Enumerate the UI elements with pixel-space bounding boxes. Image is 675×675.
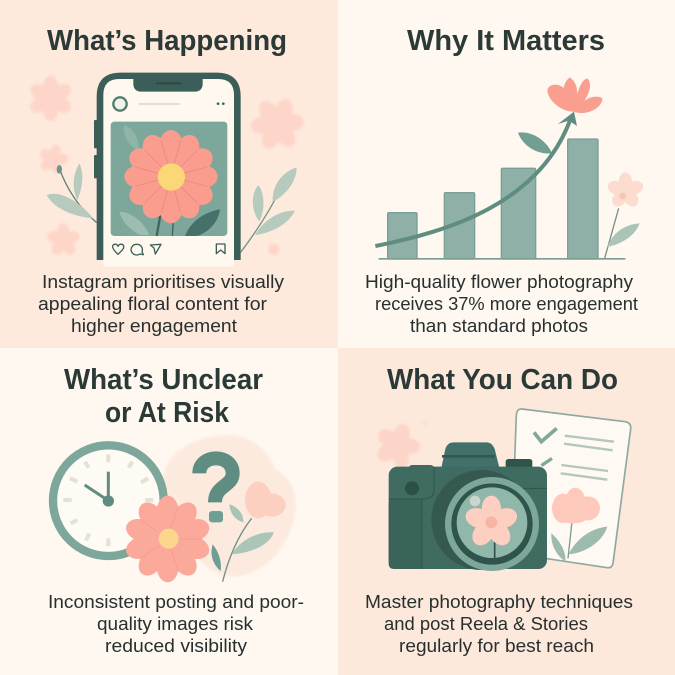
illustration: camera and checklist bbox=[367, 409, 631, 571]
flower on arrow bbox=[547, 77, 602, 113]
leaf on arrow bbox=[518, 132, 552, 154]
body text: what's unclear: quality images risk bbox=[97, 614, 254, 634]
heading: what you can do: What You Can Do bbox=[387, 364, 618, 396]
heading: what's unclear or at risk: or At Risk bbox=[105, 397, 230, 429]
heading: what's happening: What’s Happening bbox=[47, 25, 287, 57]
panel background: what's unclear bbox=[0, 348, 338, 675]
illustration: clock, question mark and flowers bbox=[53, 435, 296, 582]
small pale flower bbox=[605, 172, 645, 258]
sprig bbox=[211, 504, 274, 582]
body text: what's unclear bbox=[48, 592, 304, 656]
panel: what's happening bbox=[0, 0, 338, 348]
body text: why it matters: than standard photos bbox=[410, 316, 588, 336]
illustration: rising bar chart bbox=[375, 77, 645, 260]
body text: what you can do: Master photography techniques bbox=[365, 592, 633, 612]
body text: why it matters bbox=[365, 272, 638, 336]
left branch bbox=[47, 163, 97, 223]
checklist paper bbox=[511, 409, 631, 568]
pale tulip bbox=[245, 482, 286, 518]
body text: what's unclear: reduced visibility bbox=[105, 636, 247, 656]
body text: what's happening: appealing floral content for bbox=[38, 294, 267, 314]
panel background: what's happening bbox=[0, 0, 338, 348]
decorative pale flowers bbox=[27, 76, 314, 257]
body text: what you can do bbox=[365, 592, 633, 656]
action icons bbox=[113, 244, 225, 255]
bars bbox=[388, 139, 598, 259]
body text: why it matters: High-quality flower photography bbox=[365, 272, 633, 292]
panel: why it matters bbox=[338, 0, 675, 348]
body text: what you can do: regularly for best reach bbox=[399, 636, 594, 656]
panel: what you can do bbox=[338, 348, 675, 675]
body text: what's unclear: Inconsistent posting and poor- bbox=[48, 592, 304, 612]
body text: what's happening bbox=[38, 272, 284, 336]
camera lens bbox=[431, 470, 539, 571]
paper flower bbox=[551, 488, 607, 562]
pale blob bbox=[163, 435, 296, 577]
camera body bbox=[389, 442, 547, 569]
heading: why it matters: Why It Matters bbox=[407, 25, 605, 57]
heading: what's unclear or at risk bbox=[64, 364, 263, 429]
right branch bbox=[241, 167, 297, 252]
body text: what you can do: and post Reela & Stories bbox=[384, 614, 588, 634]
baseline axis bbox=[379, 258, 625, 260]
body text: what's happening: higher engagement bbox=[71, 316, 237, 336]
growth arrow bbox=[375, 112, 577, 246]
illustration: phone with flower bbox=[27, 73, 314, 267]
clock bbox=[53, 445, 164, 556]
photo with flower bbox=[111, 122, 227, 236]
body text: why it matters: receives 37% more engagement bbox=[375, 294, 638, 314]
body text: what's happening: Instagram prioritises visually bbox=[42, 272, 284, 292]
coral flower bbox=[123, 496, 212, 582]
panel: what's unclear or at risk bbox=[0, 348, 338, 675]
panel background: what you can do bbox=[338, 348, 675, 675]
question mark bbox=[199, 458, 233, 522]
heading: what's unclear or at risk: What’s Unclear bbox=[64, 364, 263, 396]
profile row bbox=[113, 97, 225, 111]
pale flower bbox=[367, 416, 429, 476]
phone body bbox=[94, 73, 241, 267]
panel background: why it matters bbox=[338, 0, 675, 348]
